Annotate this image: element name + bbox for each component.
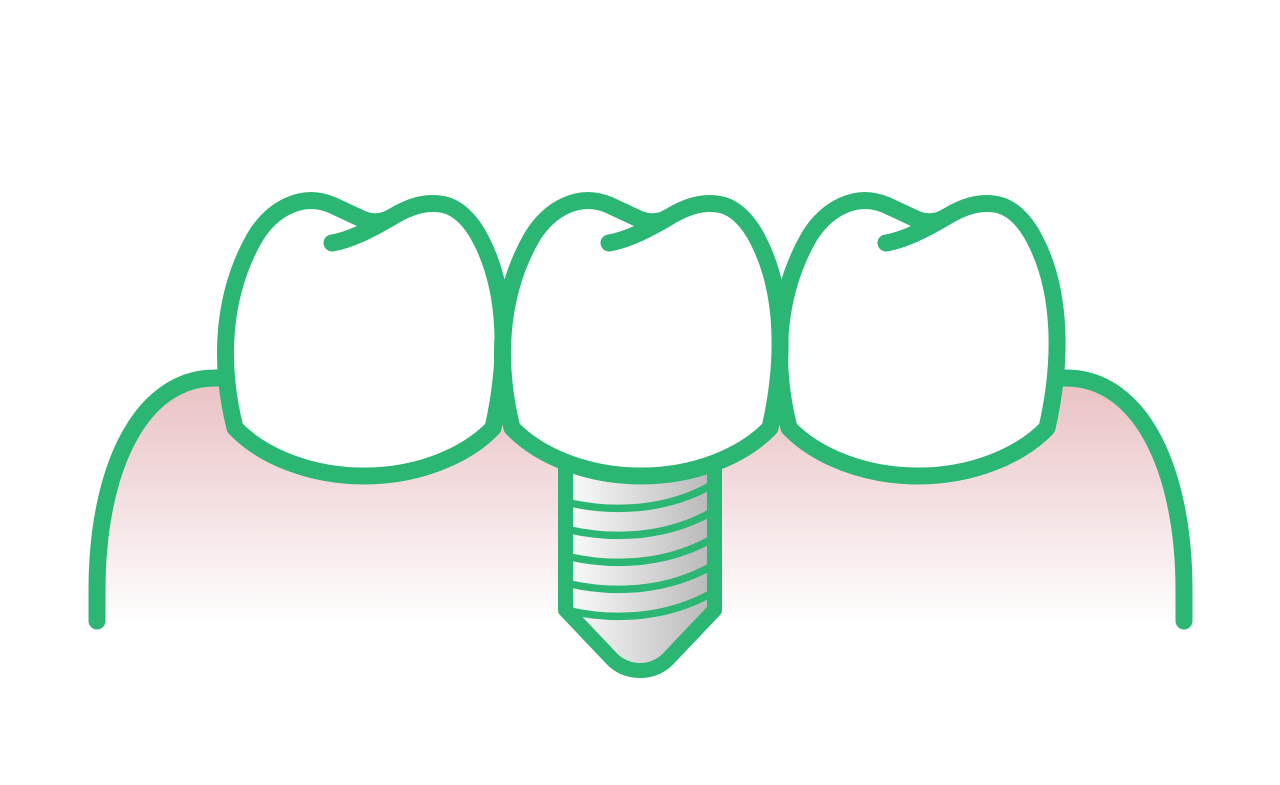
implant screw [566,460,714,670]
implant threads [570,486,710,616]
center implant crown [502,201,780,476]
right tooth [779,201,1057,476]
left tooth [225,201,503,476]
gum tissue [97,378,1184,621]
